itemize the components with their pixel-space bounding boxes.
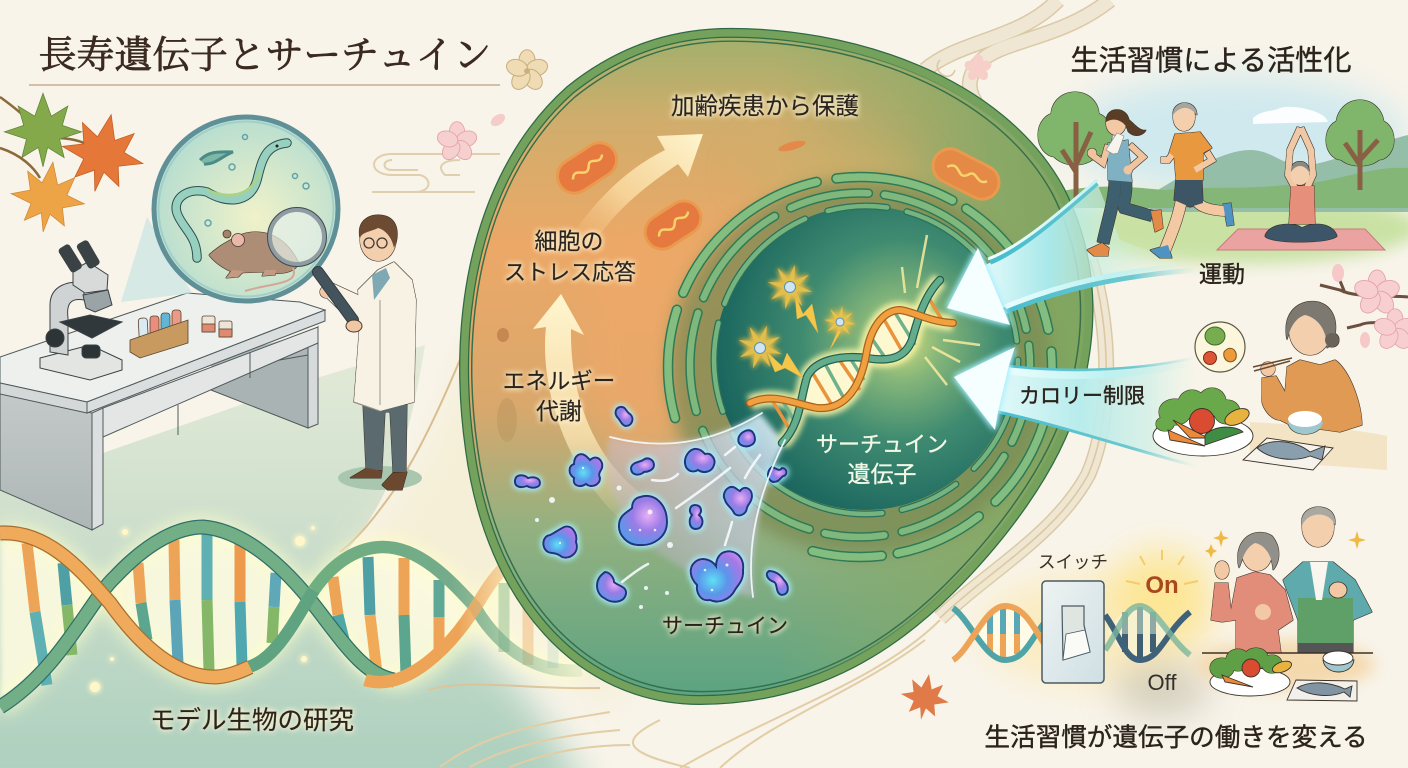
runner woman: [1087, 110, 1163, 256]
label: on with rays: On: [1145, 572, 1179, 599]
runner man: [1150, 103, 1234, 258]
flowing ribbons: [925, 0, 1110, 618]
background: green hill lower left: [0, 300, 620, 768]
label: energy metabolism: 代謝: [536, 398, 582, 424]
panel: laboratory desk: [0, 293, 325, 530]
sirtuin proteins: [515, 407, 788, 602]
scene background: park sky hills and trees: [1038, 77, 1408, 264]
sirtuin gene DNA: [732, 235, 980, 443]
label: cell stress response: 細胞の: [534, 228, 604, 254]
light rays: [902, 235, 980, 385]
arrow: energy metabolism upward: [533, 294, 650, 530]
heading: lifestyle changes gene activity: 生活習慣が遺伝子の働きを変える: [984, 723, 1368, 752]
icon: tan cherry blossom: [504, 50, 550, 93]
switch glow: [980, 550, 1212, 716]
arrow: calorie restriction into nucleus: [954, 347, 1203, 468]
title: 長寿遺伝子とサーチュイン: [39, 35, 491, 77]
magnifying glass: [268, 208, 362, 332]
protein stream fan: [606, 413, 785, 597]
pink flower on ribbon: [963, 54, 993, 82]
sparkle stars: [1205, 530, 1366, 558]
helix strands: [0, 527, 582, 707]
icon: microscope: [40, 240, 122, 380]
arrow: exercise into nucleus: [947, 180, 1195, 325]
yoga person: [1265, 128, 1337, 242]
maple leaf bottom: [897, 670, 953, 724]
cloud swirl and pink flower: [372, 111, 507, 192]
label: sirtuin gene: 遺伝子: [848, 461, 916, 487]
elderly couple and meal: [1195, 507, 1375, 701]
label: cell stress response: [504, 228, 636, 285]
panel: nucleus: [668, 177, 1052, 557]
label: model organism research: モデル生物の研究: [150, 707, 354, 735]
speckles: [559, 467, 728, 591]
panel: cell: [464, 33, 1089, 700]
helix rungs: [27, 533, 553, 685]
cherry branch right: [1320, 264, 1408, 352]
label: sirtuin: サーチュイン: [662, 615, 788, 638]
vegetable plate: [1153, 388, 1253, 456]
label: energy metabolism: エネルギー: [503, 369, 615, 394]
label: energy metabolism: [503, 369, 615, 424]
DNA rungs: [772, 300, 942, 430]
label: exercise: 運動: [1199, 261, 1245, 287]
woman eating with chopsticks: [1250, 301, 1387, 470]
label: switch: スイッチ: [1038, 552, 1108, 572]
maple leaves top left: [0, 93, 151, 237]
scientist: [320, 215, 422, 490]
star sparks and bolts: [732, 261, 858, 378]
icon: vegetable bubble: [1195, 322, 1245, 372]
light cone from microscope: [121, 217, 192, 302]
mitochondria: [551, 136, 1005, 256]
label: off: Off: [1148, 670, 1177, 695]
label: calorie restriction: カロリー制限: [1019, 385, 1145, 408]
DNA interior: [803, 310, 920, 408]
label: sirtuin gene: サーチュイン: [816, 432, 948, 457]
magnified circle: worm and mouse: [154, 117, 338, 301]
nuclear membrane arcs: [668, 177, 1052, 557]
heading: activation by lifestyle: 生活習慣による活性化: [1070, 44, 1352, 76]
label: protection from age-related disease: 加齢疾患から保護: [671, 93, 859, 119]
DNA helix lower left: [0, 526, 585, 707]
sparkles: [90, 526, 315, 692]
test tube rack and jars: [130, 310, 232, 358]
label: sirtuin gene: [816, 432, 948, 487]
icon: light switch: [1042, 581, 1104, 683]
DNA glow: [750, 280, 953, 443]
helix pale interior: [0, 527, 475, 700]
decorative flowing lines: [340, 170, 940, 768]
label: cell stress response: ストレス応答: [504, 260, 636, 285]
stream arrows and dots: [535, 413, 785, 609]
label: on with rays: [1126, 550, 1198, 599]
arrow: stress response to protection: [565, 134, 703, 250]
fish dish: [1243, 438, 1333, 470]
joggers and yoga: [1087, 103, 1385, 258]
small DNA through switch: [953, 606, 1190, 660]
